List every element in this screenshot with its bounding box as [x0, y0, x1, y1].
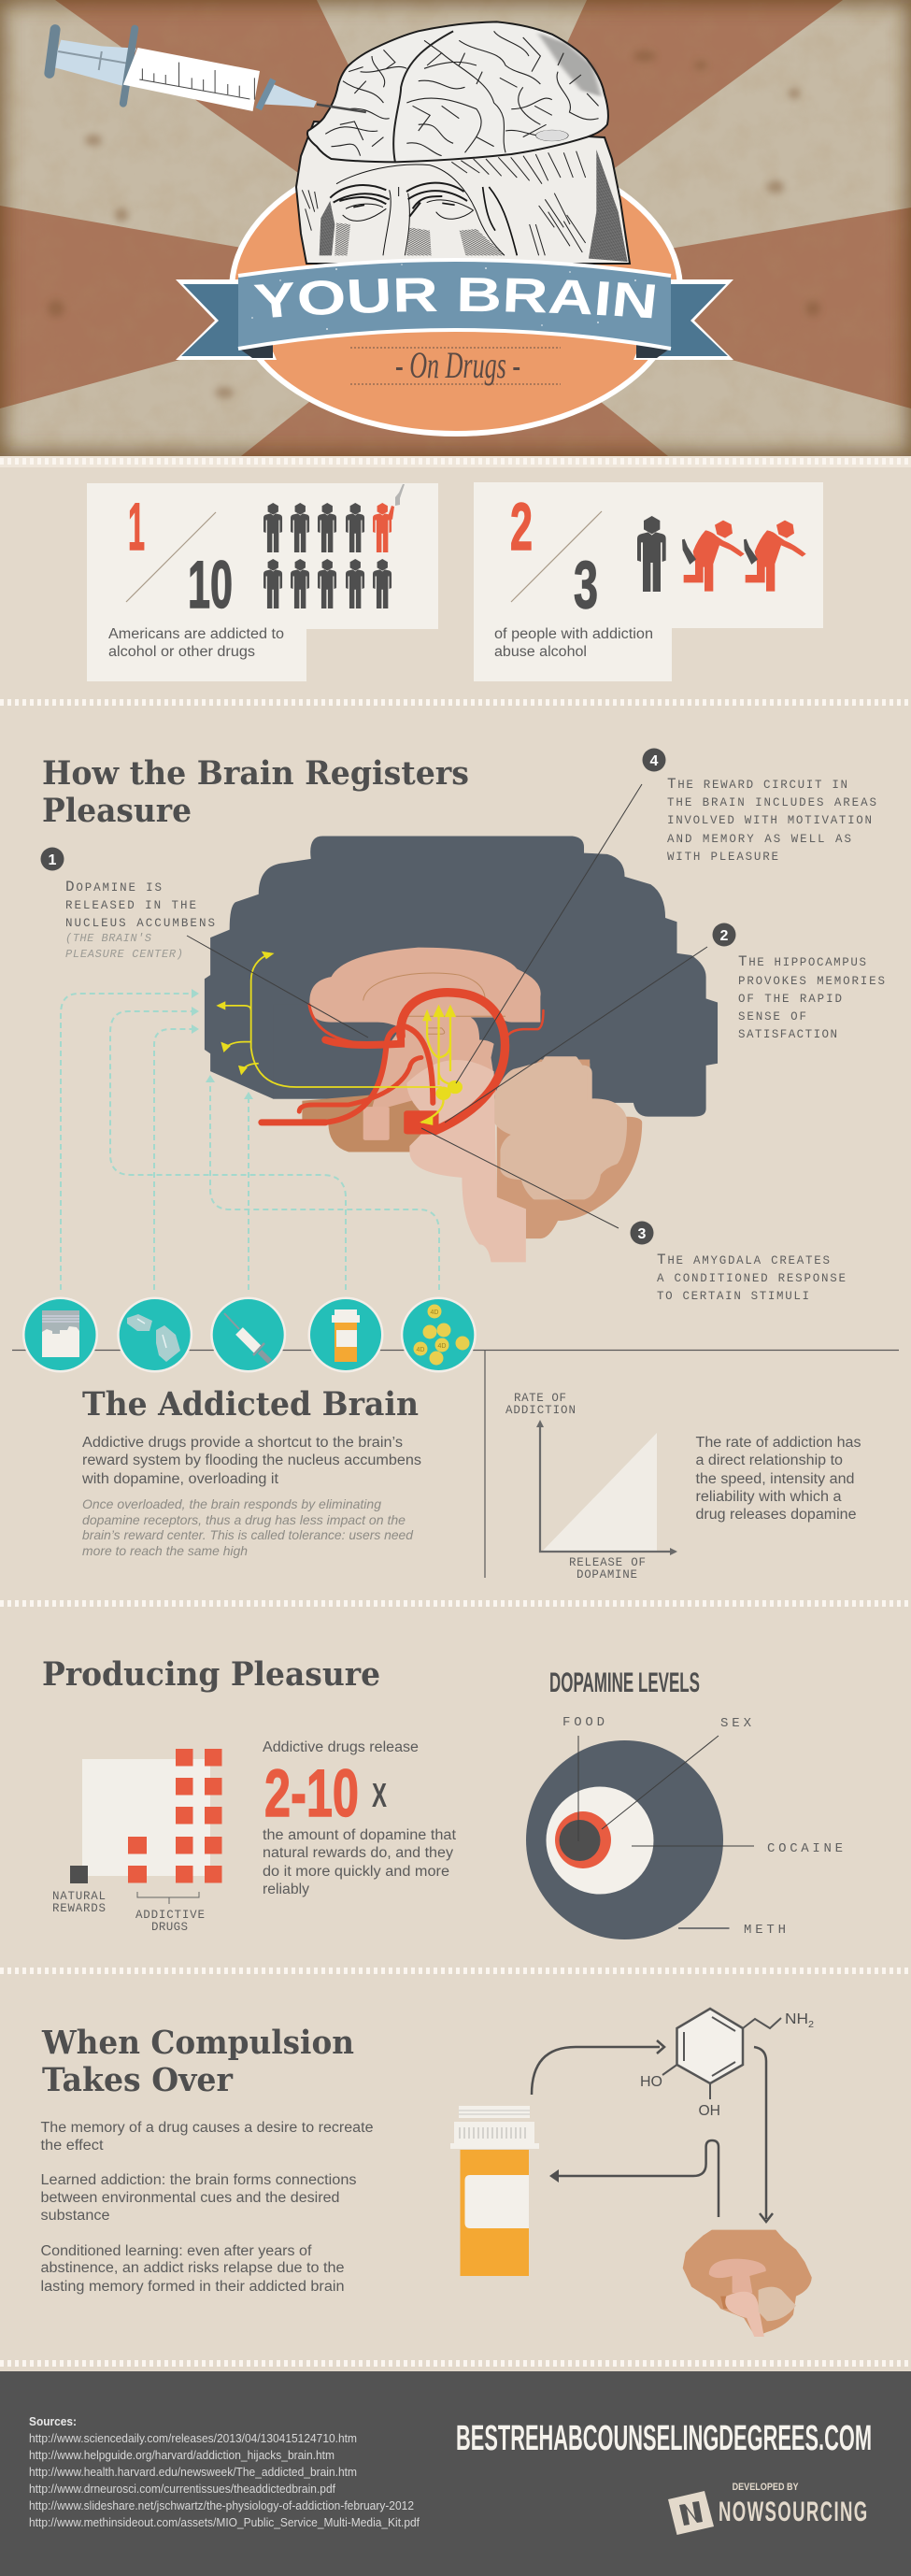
text: rate of addiction — [695, 1435, 861, 1523]
caption: of people with addiction — [494, 626, 653, 642]
stat: 2-10 x — [263, 1739, 457, 1897]
people with bottles — [637, 516, 806, 592]
compulsion text — [41, 2120, 373, 2295]
icon: small brain — [683, 2230, 812, 2337]
hero banner — [0, 0, 911, 456]
icon: pills: 4D — [431, 1309, 438, 1316]
callout 1: dopamine: PLEASURE CENTER) — [65, 948, 183, 961]
logo: nowsourcing — [668, 2491, 869, 2535]
callout 3: amygdala — [630, 1221, 846, 1303]
stat: 2-10 x: X — [372, 1776, 387, 1814]
icon: crystals — [117, 1297, 192, 1372]
limbic region — [309, 948, 541, 1109]
chart: natural vs addictive bars: ADDICTIVE — [135, 1909, 205, 1922]
callout 4: reward circuit: INVOLVED WITH MOTIVATION — [667, 814, 872, 827]
text: rate of addiction: the speed, intensity and — [695, 1471, 854, 1487]
divider — [0, 2360, 911, 2367]
badge oval — [230, 186, 682, 436]
badge 4: 4 — [650, 753, 659, 769]
panel: 1 in 10 stat: 1 — [128, 491, 145, 565]
drug icons row — [22, 1297, 477, 1372]
heading: how the brain registers pleasure: Pleasure — [42, 792, 192, 830]
chart: dopamine levels: METH — [744, 1923, 786, 1938]
cerebellum inner — [497, 1059, 625, 1197]
callout 4: reward circuit — [643, 748, 876, 864]
callout lines — [187, 784, 707, 1228]
compulsion text: substance — [41, 2208, 110, 2224]
callout 4: reward circuit: WITH PLEASURE — [667, 851, 778, 864]
reward pathway red — [262, 993, 543, 1135]
sources: http://www.health.harvard.edu/newsweek/The_addicted_brain.htm — [29, 2465, 357, 2479]
caption: alcohol or other drugs — [108, 644, 255, 660]
title — [254, 278, 656, 318]
caption — [108, 626, 284, 660]
text: rate of addiction: drug releases dopamine — [695, 1507, 856, 1523]
chart: dopamine levels: FOOD — [562, 1715, 605, 1730]
sunburst rays — [0, 0, 911, 456]
icon: pill bottle — [308, 1297, 383, 1372]
stat: 2-10 x: 2-10 — [264, 1757, 359, 1831]
compulsion text: lasting memory formed in their addicted brain — [41, 2279, 344, 2295]
divider hero — [0, 456, 911, 467]
chart: dopamine levels — [526, 1667, 843, 1939]
title: YOUR BRAIN — [254, 278, 656, 318]
italic note: dopamine receptors, thus a drug has less impact on the — [82, 1512, 406, 1527]
brain stem — [406, 1060, 526, 1262]
sources: Sources: — [29, 2414, 77, 2428]
dopamine molecule: NH — [785, 2011, 806, 2027]
callout 2: hippocampus: THE HIPPOCAMPUS — [738, 953, 866, 970]
stat: 2-10 x: reliably — [263, 1882, 309, 1897]
heading: how the brain registers pleasure: How the Brain Registers — [42, 754, 469, 793]
panel: 2 in 3 stat — [474, 482, 823, 681]
stat: 2-10 x: natural rewards do, and they — [263, 1845, 453, 1861]
body text: with dopamine, overloading it — [81, 1471, 279, 1487]
brown base region — [302, 1087, 433, 1152]
callout 2: hippocampus: OF THE RAPID — [738, 993, 842, 1006]
chart: natural vs addictive bars: REWARDS — [52, 1902, 106, 1915]
sources: http://www.drneurosci.com/currentissues/theaddictedbrain.pdf — [29, 2482, 335, 2496]
callout 2: hippocampus: PROVOKES MEMORIES — [738, 975, 885, 988]
ribbon band — [238, 260, 671, 349]
stat: 2-10 x: the amount of dopamine that — [263, 1827, 457, 1843]
callout 2: hippocampus: SENSE OF — [738, 1010, 806, 1023]
developed by: DEVELOPED BY — [733, 2482, 799, 2493]
sources: http://www.sciencedaily.com/releases/2013/04/130415124710.htm — [29, 2431, 357, 2445]
chart title: DOPAMINE LEVELS — [549, 1667, 700, 1698]
compulsion text: between environmental cues and the desired — [41, 2190, 340, 2206]
chart: rate of addiction: ADDICTION — [505, 1404, 576, 1417]
number 10: 10 — [188, 549, 233, 623]
italic note: more to reach the same high — [82, 1543, 248, 1558]
heading: when compulsion takes over: Takes Over — [42, 2061, 234, 2099]
italic note — [82, 1496, 414, 1558]
caption — [494, 626, 653, 660]
brain diagram — [205, 836, 718, 1262]
divider — [0, 699, 911, 706]
divider — [0, 1968, 911, 1974]
badge 3: 3 — [638, 1226, 647, 1242]
chart: natural vs addictive bars: DRUGS — [151, 1921, 188, 1934]
body text: reward system by flooding the nucleus accumbens — [82, 1453, 421, 1468]
number 2: 2 — [510, 491, 533, 565]
syringe — [50, 29, 366, 112]
compulsion text: Learned addiction: the brain forms connections — [41, 2172, 357, 2188]
body text — [81, 1435, 421, 1487]
arrow: bottle to molecule — [532, 2040, 664, 2095]
ribbon tails — [176, 279, 733, 360]
number 3: 3 — [574, 549, 598, 623]
callout 2: hippocampus: SATISFACTION — [738, 1028, 837, 1041]
badge 3 — [630, 1221, 654, 1245]
section rule — [12, 1350, 899, 1578]
badge 1 — [41, 847, 64, 871]
chart: dopamine levels: COCAINE — [767, 1841, 843, 1856]
icon: syringe — [210, 1297, 286, 1372]
arrow: brain to bottle — [554, 2140, 719, 2217]
dopamine molecule — [640, 2009, 814, 2119]
heading: when compulsion takes over: When Compulsion — [41, 2024, 354, 2062]
engraved head with exposed brain — [296, 21, 630, 264]
badge 1: 1 — [49, 852, 57, 868]
compulsion text: the effect — [41, 2138, 104, 2154]
italic note: Once overloaded, the brain responds by eliminating — [82, 1496, 381, 1511]
dashed drug pathways — [61, 989, 439, 1290]
badge 2 — [712, 923, 736, 946]
chart: rate of addiction: DOPAMINE — [576, 1568, 637, 1581]
compulsion text: Conditioned learning: even after years of — [41, 2243, 312, 2259]
compulsion text: abstinence, an addict risks relapse due to the — [41, 2260, 344, 2276]
callout 4: reward circuit: THE REWARD CIRCUIT IN — [667, 776, 847, 793]
callout 1: dopamine: RELEASED IN THE — [65, 899, 196, 912]
stat: 2-10 x: Addictive drugs release — [263, 1739, 419, 1755]
arrowhead — [549, 2169, 559, 2182]
callout 1: dopamine: NUCLEUS ACCUMBENS — [65, 917, 215, 930]
divider — [0, 1600, 911, 1607]
chart: dopamine levels: SEX — [720, 1716, 752, 1731]
badge 2: 2 — [720, 928, 729, 944]
callout 1: dopamine: (THE BRAIN'S — [65, 932, 151, 945]
subtitle — [350, 344, 561, 386]
section: the addicted brain — [81, 1385, 421, 1558]
text: rate of addiction: reliability with which a — [695, 1489, 842, 1505]
badge 4 — [643, 748, 665, 772]
callout 1: dopamine — [41, 847, 215, 961]
icon: pill bottle — [450, 2106, 539, 2276]
caption: abuse alcohol — [494, 644, 587, 660]
heading: how the brain registers pleasure — [42, 754, 469, 830]
callout 3: amygdala: TO CERTAIN STIMULI — [657, 1290, 809, 1303]
sources — [29, 2414, 420, 2529]
heading: producing pleasure: Producing Pleasure — [42, 1655, 380, 1694]
heading: when compulsion takes over — [41, 2024, 354, 2099]
chart: rate of addiction: RELEASE OF — [569, 1556, 646, 1569]
chart: rate of addiction: RATE OF — [514, 1392, 566, 1405]
arrow: molecule to brain — [754, 2047, 773, 2222]
chart: rate of addiction — [505, 1392, 677, 1581]
subtitle: - On Drugs - — [395, 344, 520, 386]
text: rate of addiction: a direct relationship to — [695, 1453, 843, 1468]
cerebrum — [205, 836, 718, 1117]
dopamine pathway yellow — [218, 953, 455, 1123]
sources: http://www.helpguide.org/harvard/addiction_hijacks_brain.htm — [29, 2448, 335, 2462]
cerebellum outer — [497, 1060, 642, 1238]
panel: 1 in 10 stat — [87, 483, 438, 681]
sources: http://www.methinsideout.com/assets/MIO_Public_Service_Multi-Media_Kit.pdf — [29, 2515, 420, 2529]
chart: natural vs addictive bars: NATURAL — [52, 1890, 106, 1903]
heading: The Addicted Brain — [82, 1385, 419, 1424]
icon: pills: 4D — [438, 1343, 446, 1350]
callout 2: hippocampus — [712, 923, 885, 1041]
callout 3: amygdala: THE AMYGDALA CREATES — [657, 1252, 830, 1268]
logo: nowsourcing: NOWSOURCING — [719, 2497, 869, 2527]
footer — [0, 2371, 911, 2576]
text: rate of addiction: The rate of addiction has — [695, 1435, 861, 1451]
callout 4: reward circuit: THE BRAIN INCLUDES AREAS — [667, 796, 876, 809]
italic note: brain’s reward center. This is called tolerance: users need — [82, 1527, 414, 1542]
icon: powder bag — [22, 1297, 98, 1372]
stat: 2-10 x: do it more quickly and more — [263, 1864, 449, 1880]
dopamine molecule: OH — [699, 2103, 720, 2119]
chart: natural vs addictive bars — [52, 1749, 222, 1934]
callout 4: reward circuit: AND MEMORY AS WELL AS — [667, 833, 851, 846]
icon: pills: 4D — [417, 1347, 424, 1353]
dopamine molecule: 2 — [808, 2020, 814, 2030]
callout 3: amygdala: A CONDITIONED RESPONSE — [657, 1272, 846, 1285]
compulsion text: The memory of a drug causes a desire to recreate — [41, 2120, 373, 2136]
people icons — [263, 484, 405, 608]
caption: Americans are addicted to — [108, 626, 284, 642]
body text: Addictive drugs provide a shortcut to the brain’s — [82, 1435, 403, 1451]
sources: http://www.slideshare.net/jschwartz/the-physiology-of-addiction-february-2012 — [29, 2498, 414, 2512]
icon: pills — [401, 1297, 477, 1372]
dopamine molecule: HO — [640, 2074, 662, 2090]
callout 1: dopamine: DOPAMINE IS — [65, 879, 162, 895]
